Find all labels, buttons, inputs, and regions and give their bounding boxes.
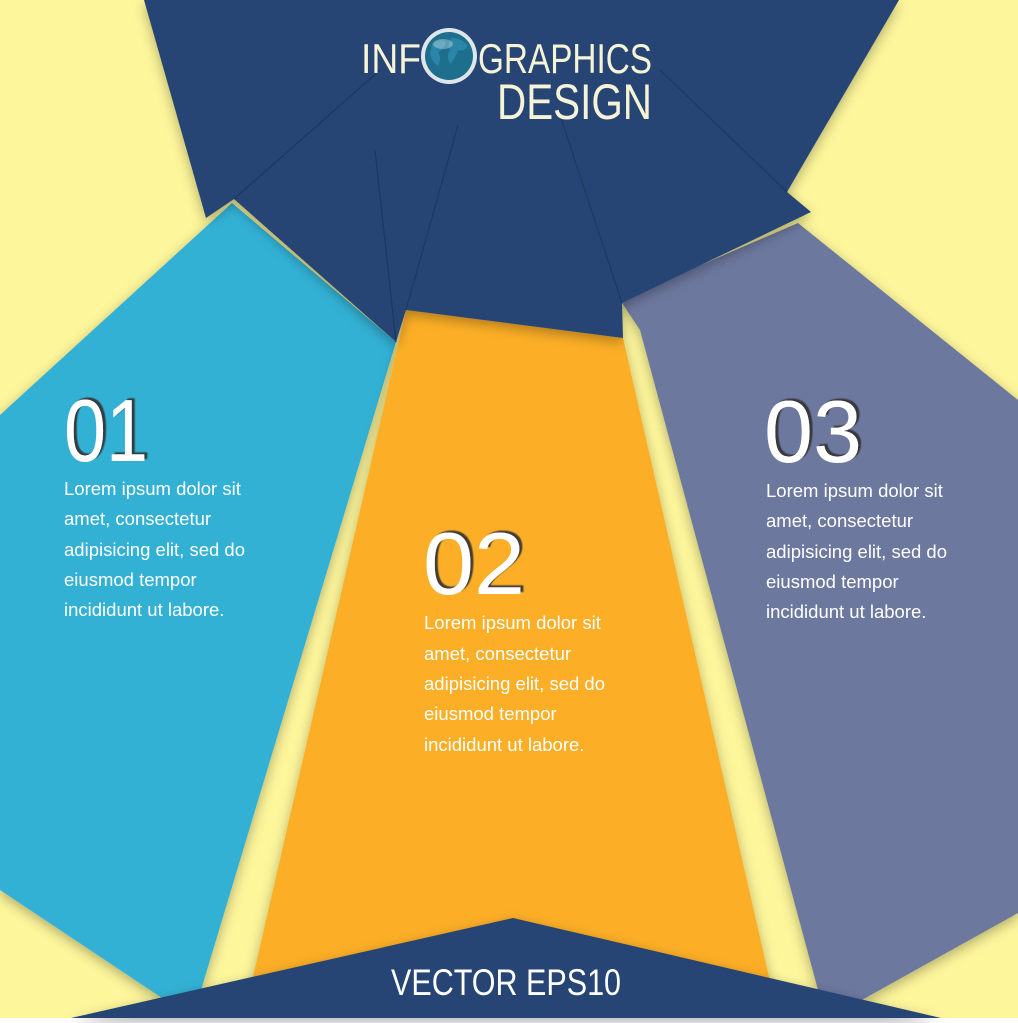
text block 03: Lorem ipsum dolor sit — [766, 480, 943, 501]
text block 03: eiusmod tempor — [766, 571, 899, 592]
text block 01: Lorem ipsum dolor sit — [64, 478, 241, 499]
title: DESIGN — [497, 74, 652, 130]
icon: globe — [421, 28, 477, 84]
text block 02: amet, consectetur — [424, 643, 571, 664]
text block 03 — [766, 480, 947, 622]
number 01: 01 — [64, 381, 148, 480]
text block 03: adipisicing elit, sed do — [766, 541, 947, 562]
number 02: 02 — [423, 514, 525, 613]
text block 01: incididunt ut labore. — [64, 599, 224, 620]
top navy fan header — [144, 0, 899, 342]
text block 02: adipisicing elit, sed do — [424, 673, 605, 694]
title — [361, 28, 652, 130]
text block 02: incididunt ut labore. — [424, 734, 584, 755]
text block 01: amet, consectetur — [64, 508, 211, 529]
text block 02 — [424, 612, 605, 755]
text block 03: incididunt ut labore. — [766, 601, 926, 622]
text block 01: eiusmod tempor — [64, 569, 197, 590]
title: GRAPHICS — [478, 35, 652, 82]
bottom navy triangle — [71, 918, 941, 1018]
text block 03: amet, consectetur — [766, 510, 913, 531]
footer text: VECTOR EPS10 — [391, 962, 621, 1003]
text block 01 — [64, 478, 245, 620]
number 03: 03 — [764, 382, 862, 481]
title: INF — [361, 35, 421, 82]
text block 02: eiusmod tempor — [424, 703, 557, 724]
text block 02: Lorem ipsum dolor sit — [424, 612, 601, 633]
text block 01: adipisicing elit, sed do — [64, 539, 245, 560]
panel: purple 03 — [620, 223, 1018, 1001]
